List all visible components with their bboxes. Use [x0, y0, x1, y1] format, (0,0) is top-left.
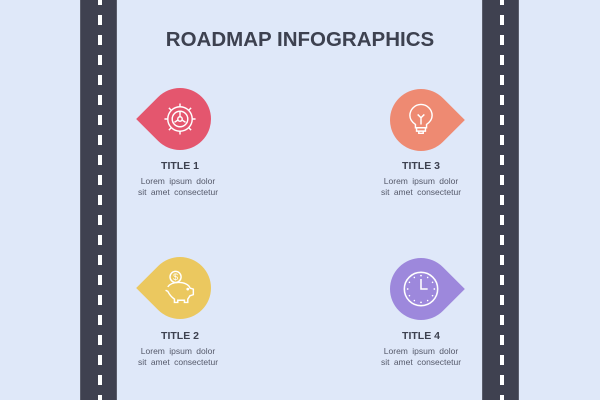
- desc 4: sit amet consectetur: [381, 357, 461, 367]
- desc 1: Lorem ipsum dolor: [141, 176, 215, 186]
- desc 3: Lorem ipsum dolor: [384, 176, 458, 186]
- pin 2: piggy bank: [136, 257, 211, 319]
- pin 2: piggy bank: $: [173, 272, 178, 282]
- pin 4: clock: [390, 258, 465, 320]
- desc 2: Lorem ipsum dolor: [141, 346, 215, 356]
- title: ROADMAP INFOGRAPHICS: [166, 28, 434, 51]
- text: title 1: TITLE 1: [161, 160, 199, 172]
- pin 1: gear: [136, 88, 211, 150]
- desc 3: [381, 176, 461, 197]
- text: title 4: TITLE 4: [402, 330, 440, 342]
- desc 3: sit amet consectetur: [381, 187, 461, 197]
- desc 1: [138, 176, 218, 197]
- desc 1: sit amet consectetur: [138, 187, 218, 197]
- desc 4: Lorem ipsum dolor: [384, 346, 458, 356]
- desc 2: [138, 346, 218, 367]
- text: title 3: TITLE 3: [402, 160, 440, 172]
- desc 2: sit amet consectetur: [138, 357, 218, 367]
- road: left: [80, 0, 117, 400]
- road: right: [482, 0, 519, 400]
- pin 3: bulb: [390, 89, 465, 151]
- desc 4: [381, 346, 461, 367]
- text: title 2: TITLE 2: [161, 330, 199, 342]
